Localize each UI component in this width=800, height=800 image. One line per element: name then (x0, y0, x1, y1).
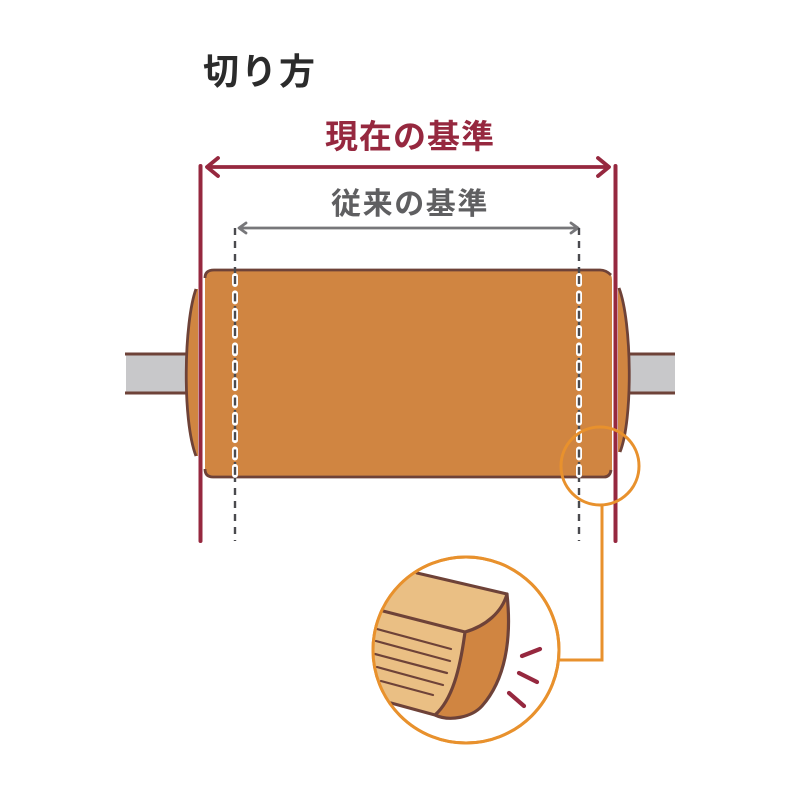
small magnifier circle (561, 427, 639, 505)
impact marks (509, 649, 540, 706)
callout connector (560, 505, 602, 660)
right roll end outline (619, 288, 629, 452)
right roll end (618, 288, 629, 452)
heading: current standard: 現在の基準 (325, 118, 495, 155)
wood side cut face (438, 601, 507, 717)
roll body (205, 270, 612, 477)
enlarged view circle (373, 557, 559, 743)
wood top face (384, 574, 505, 630)
wood front face (374, 612, 464, 714)
heading: previous standard: 従来の基準 (331, 188, 489, 221)
current standard cut line right (614, 166, 618, 541)
current standard cut line left (198, 166, 202, 541)
circle edge over wood (373, 557, 559, 743)
left axle (125, 354, 187, 393)
previous standard cut line right (578, 228, 580, 541)
previous standard cut line left (234, 228, 236, 541)
right axle (628, 354, 675, 393)
current standard arrow (207, 158, 609, 176)
enlarged cut wood (368, 557, 559, 743)
wood grain lines (375, 629, 451, 695)
left roll end outline (186, 289, 196, 456)
left roll end (186, 289, 198, 456)
previous standard arrow (239, 223, 578, 233)
wood outlines (383, 573, 509, 718)
title: 切り方 (203, 51, 317, 92)
